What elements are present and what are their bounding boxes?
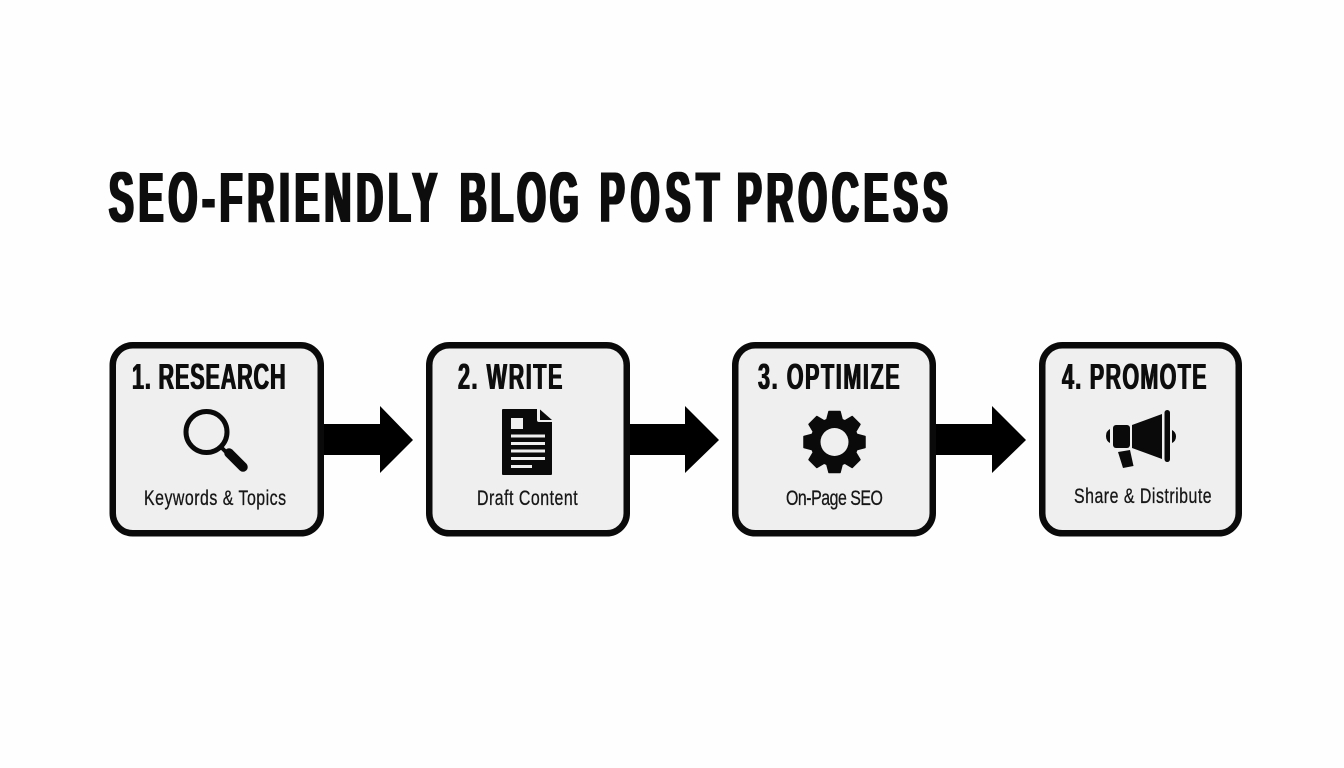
- heading: 4. PROMOTE: 4. PROMOTE: [1062, 357, 1207, 397]
- icon: gear: [804, 412, 865, 472]
- panel: step 2 write: [429, 345, 627, 533]
- panel: step 1 research: [113, 345, 321, 533]
- title: SEO-FRIENDLY: [109, 158, 437, 237]
- card background: [1042, 345, 1239, 533]
- title: [109, 158, 948, 237]
- title: POST: [600, 158, 719, 237]
- caption: Share & Distribute: Share & Distribute: [1074, 485, 1212, 509]
- caption: Draft Content: Draft Content: [477, 487, 578, 511]
- card background: [735, 345, 933, 533]
- heading: 1. RESEARCH: 1. RESEARCH: [132, 357, 286, 397]
- title: PROCESS: [737, 158, 948, 237]
- panel: step 4 promote: [1042, 345, 1239, 533]
- arrow: optimize to promote: [934, 406, 1026, 473]
- icon: document: [502, 409, 552, 475]
- heading: 3. OPTIMIZE: 3. OPTIMIZE: [758, 357, 900, 397]
- panel: step 3 optimize: [735, 345, 933, 533]
- icon: megaphone: [1106, 410, 1176, 468]
- caption: Keywords & Topics: Keywords & Topics: [144, 487, 286, 511]
- caption: On-Page SEO: On-Page SEO: [786, 487, 883, 511]
- arrow: write to optimize: [628, 406, 719, 473]
- card background: [113, 345, 321, 533]
- card background: [429, 345, 627, 533]
- icon: magnifying glass: [186, 412, 243, 467]
- title: BLOG: [460, 158, 579, 237]
- heading: 2. WRITE: 2. WRITE: [458, 357, 562, 397]
- arrow: research to write: [322, 406, 413, 473]
